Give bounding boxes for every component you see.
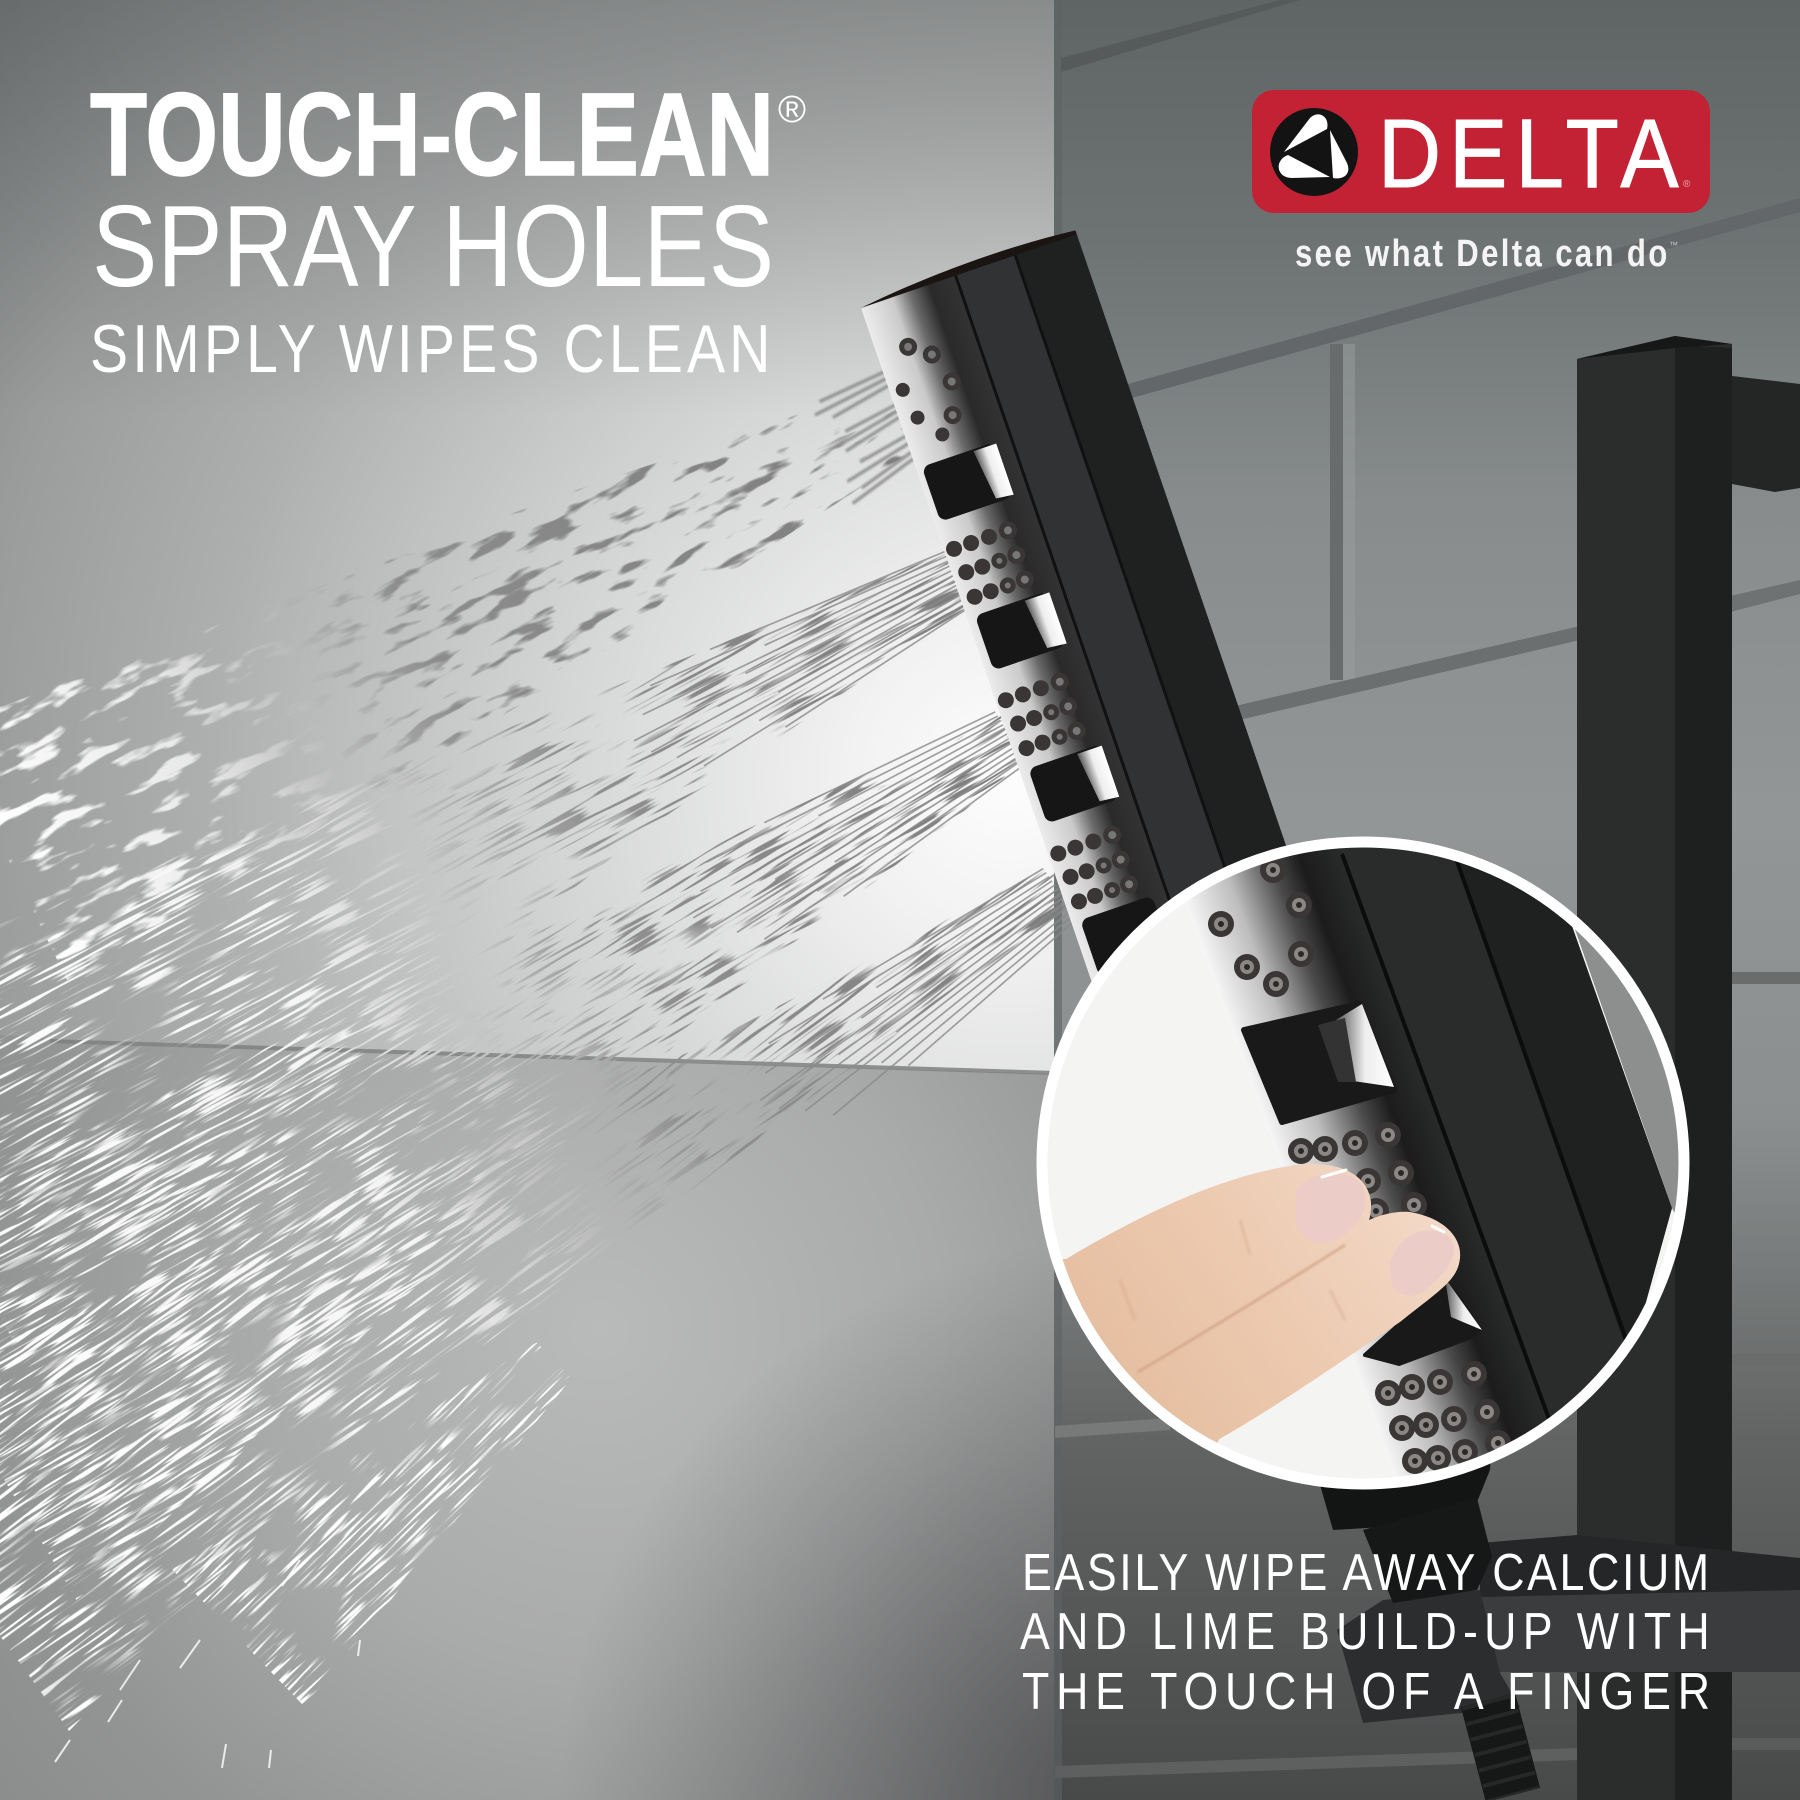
tagline: see what Delta can do bbox=[1295, 233, 1667, 275]
inset white ring bbox=[1042, 842, 1684, 1484]
nail highlights bbox=[1322, 1170, 1444, 1232]
logo mark bbox=[1270, 108, 1358, 196]
nozzles behind fingers bbox=[1288, 1122, 1427, 1224]
stray droplets bbox=[55, 1560, 360, 1768]
button 1 bbox=[922, 442, 1014, 522]
caption bbox=[1020, 1544, 1710, 1721]
middle fingernail bbox=[1390, 1230, 1454, 1296]
title bbox=[90, 69, 806, 387]
shower head: top cap bbox=[858, 226, 1077, 310]
spray jet 2: fine streams bbox=[0, 425, 1073, 1341]
index fingernail bbox=[1296, 1173, 1366, 1243]
spray fallout: lower left bbox=[172, 1278, 606, 1706]
inset photo bbox=[1062, 848, 1678, 1476]
nozzle cluster 3 bbox=[1048, 824, 1141, 914]
lower button with chrome edge bbox=[1365, 1278, 1482, 1364]
fingers bbox=[1030, 1164, 1460, 1445]
background: tiled wall bbox=[1054, 0, 1800, 1800]
inset close-up circle bbox=[1036, 836, 1690, 1490]
handset: edge and groove lines bbox=[1342, 850, 1628, 1419]
background: upper shower wall bbox=[0, 0, 1060, 1090]
background: lower shower wall bbox=[0, 1035, 1060, 1800]
button 3 bbox=[1028, 744, 1120, 824]
shower head: side face bbox=[1015, 234, 1323, 974]
logo: Delta bbox=[1252, 90, 1710, 275]
shower head bbox=[858, 226, 1323, 1027]
middle finger bbox=[1220, 1212, 1460, 1439]
subtitle: SIMPLY WIPES CLEAN bbox=[90, 311, 770, 387]
spray jet 1: droplets bbox=[0, 268, 1011, 980]
handset: black side face bbox=[1460, 862, 1672, 1340]
shower head: middle face bbox=[956, 255, 1261, 995]
trademark mark: ™ bbox=[1669, 240, 1678, 250]
nozzles: top group bbox=[881, 326, 978, 451]
button 4 bbox=[1080, 895, 1171, 977]
nozzles lower cluster bbox=[1375, 1361, 1511, 1474]
caption line 3: THE TOUCH OF A FINGER bbox=[1022, 1663, 1710, 1721]
caption line 1: EASILY WIPE AWAY CALCIUM bbox=[1022, 1544, 1709, 1602]
spray jet 3: fine streams bbox=[0, 589, 1149, 1602]
handset: silver spray face bbox=[1194, 848, 1547, 1476]
button 2 bbox=[975, 590, 1067, 671]
finger crease bbox=[1138, 1245, 1345, 1372]
spray jet 4: fine streams bbox=[0, 647, 1121, 1731]
nozzle cluster 2 bbox=[995, 670, 1088, 761]
registered mark: ® bbox=[778, 89, 806, 131]
title line: SPRAY HOLES: SPRAY HOLES bbox=[92, 181, 774, 311]
nozzle cluster 1 bbox=[944, 519, 1036, 609]
wall behind handset bbox=[1575, 930, 1678, 1213]
water spray bbox=[0, 268, 1149, 1768]
knuckle creases bbox=[1120, 1220, 1345, 1320]
logo wordmark: DELTA bbox=[1378, 99, 1679, 208]
logo badge bbox=[1252, 90, 1710, 213]
logo registered mark: ® bbox=[1683, 179, 1691, 190]
shower head: spray face bbox=[861, 276, 1202, 1027]
hose holder bracket and hose bbox=[1310, 1440, 1520, 1795]
shower head: seam lines bbox=[956, 255, 1261, 995]
button with chrome edge bbox=[1244, 1004, 1394, 1122]
index finger bbox=[1062, 1164, 1372, 1443]
shower bar and mounting arms bbox=[1480, 336, 1800, 1800]
caption line 2: AND LIME BUILD-UP WITH bbox=[1020, 1603, 1710, 1661]
handset: black front face bbox=[1350, 848, 1624, 1412]
nozzles above button bbox=[1208, 857, 1314, 997]
title line: TOUCH-CLEAN: TOUCH-CLEAN bbox=[90, 69, 774, 201]
